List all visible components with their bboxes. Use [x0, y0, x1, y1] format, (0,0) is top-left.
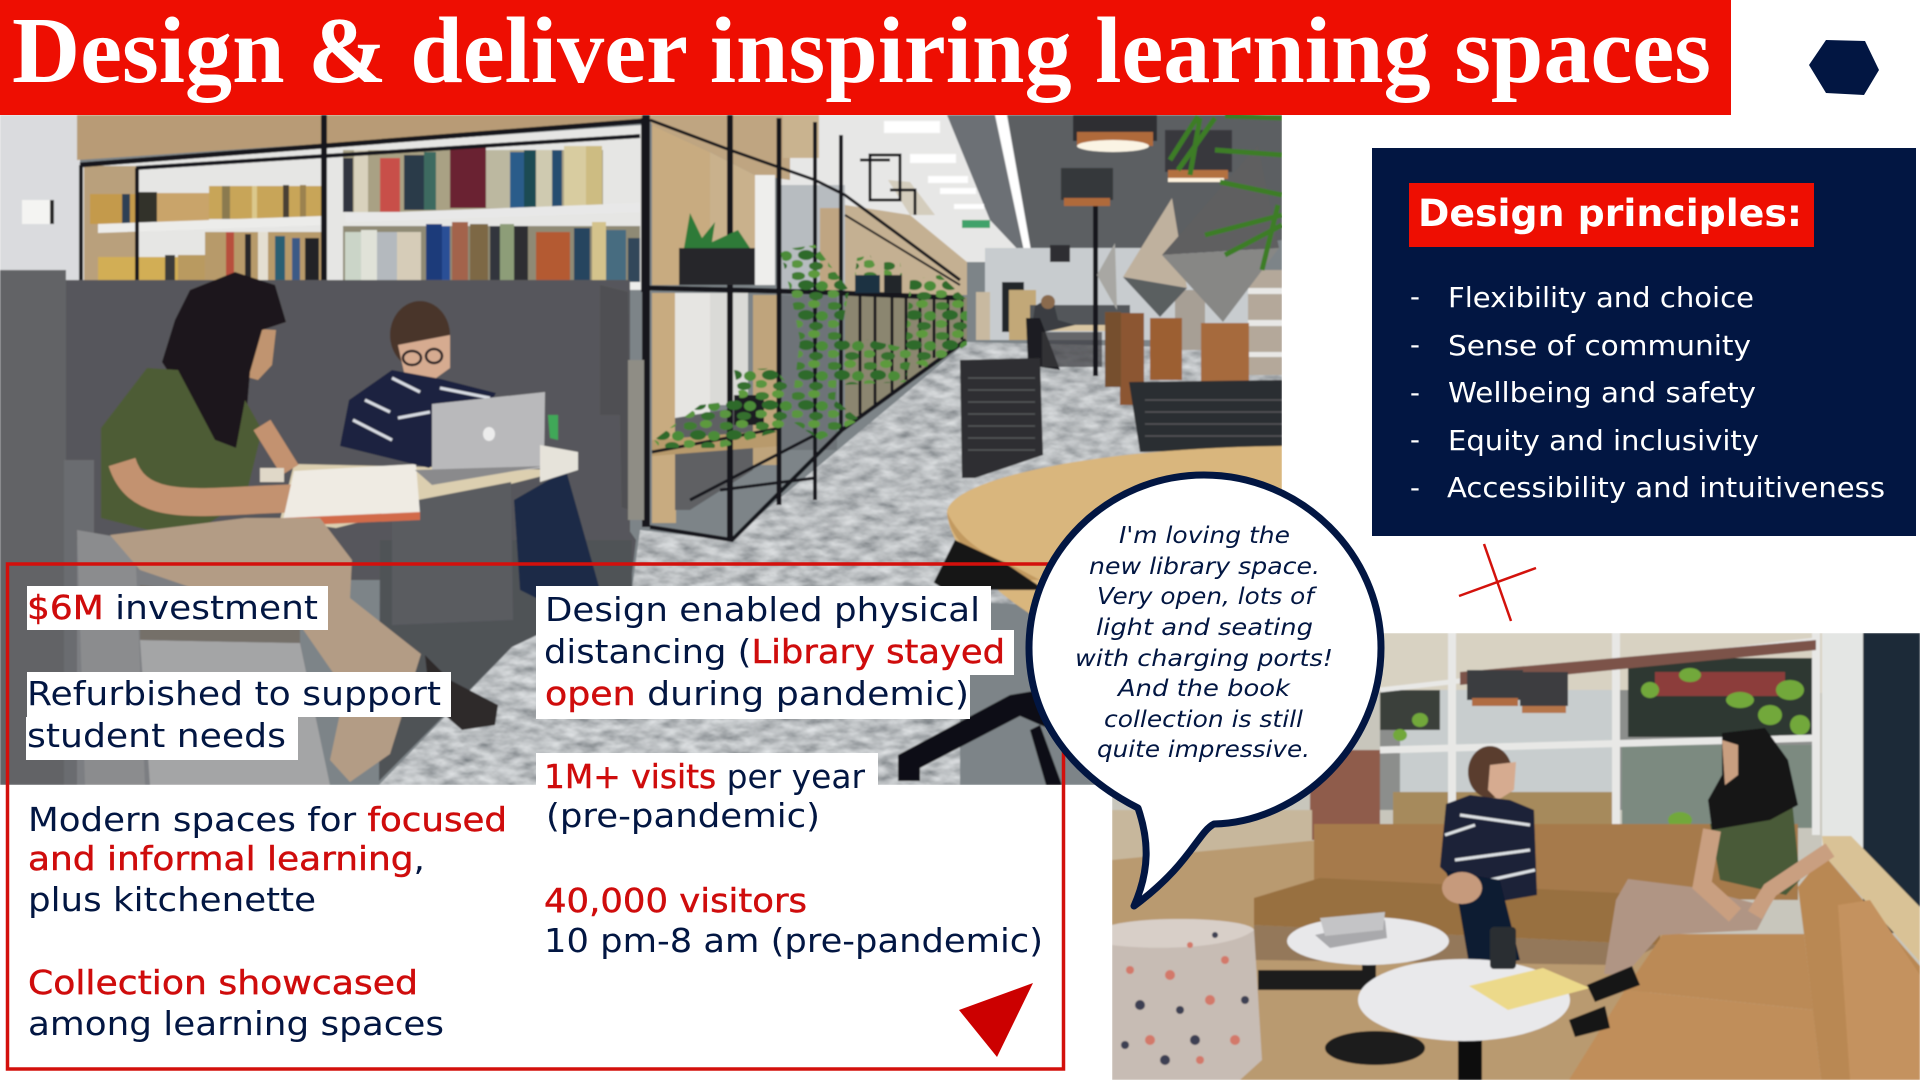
- panel: key facts frame: [8, 564, 1064, 1069]
- list of principles: -: [1410, 424, 1420, 456]
- text: modern spaces: and informal learning ,: [28, 839, 425, 878]
- text: modern spaces: [28, 800, 507, 919]
- table one: [1362, 960, 1376, 1010]
- back room: [1112, 633, 1822, 693]
- title: Design & deliver inspiring learning spaces: [12, 0, 1711, 103]
- window frame: [1380, 633, 1816, 835]
- text: visits: (pre-pandemic): [546, 796, 820, 835]
- list of principles: Wellbeing and safety: [1448, 377, 1756, 409]
- sofa arm right: [601, 416, 636, 571]
- list of principles: Accessibility and intuitiveness: [1447, 472, 1885, 504]
- pendant lamps: [1050, 115, 1232, 376]
- quote text: And the book: [1116, 674, 1292, 702]
- floor: [1112, 840, 1700, 1080]
- aisle ceiling: [1007, 115, 1282, 248]
- photo: lounge with two students: [1112, 633, 1920, 1080]
- quote text: with charging ports!: [1075, 644, 1333, 672]
- green top: [101, 368, 262, 539]
- shelf frames black: [646, 115, 966, 540]
- text: physical distancing: distancing ( Library stayed: [544, 632, 1005, 671]
- table: [280, 464, 566, 528]
- open book: [283, 464, 420, 520]
- book by laptop: [540, 445, 578, 482]
- desk and person: [1050, 324, 1106, 332]
- wall and dark panel: [1822, 633, 1866, 848]
- text: collection: [28, 963, 444, 1043]
- text: visits: 1M+ visits per year: [544, 757, 865, 796]
- shelf unit panels lower: [652, 293, 967, 523]
- text: physical distancing: [536, 586, 1014, 719]
- right sofa: [1625, 934, 1813, 1010]
- heading: design principles: [1409, 183, 1814, 247]
- books upper right: [343, 146, 640, 283]
- shelf unit panels upper: [652, 115, 967, 295]
- arms: [122, 462, 318, 502]
- quote text: [1075, 521, 1333, 763]
- quote text: quite impressive.: [1097, 735, 1310, 763]
- list of principles: -: [1410, 281, 1420, 313]
- upper wood cabinets: [77, 115, 650, 160]
- quote text: collection is still: [1104, 705, 1303, 733]
- round table: [947, 446, 1282, 620]
- text: physical distancing: open during pandemic): [545, 674, 969, 713]
- right woman legs: [514, 470, 600, 600]
- icon: navy hexagon: [1809, 40, 1879, 95]
- text: collection: Collection showcased: [28, 963, 418, 1002]
- text: visitors: 10 pm-8 am (pre-pandemic): [544, 921, 1043, 960]
- woman right: [390, 301, 450, 369]
- sofa back: [64, 280, 630, 580]
- back sofa: [1314, 824, 1798, 900]
- list of principles: [1410, 281, 1885, 504]
- text: physical distancing: Design enabled physical: [545, 590, 980, 629]
- icon: red triangle: [959, 983, 1033, 1057]
- heading: design principles: Design principles:: [1418, 192, 1802, 235]
- ledge: [1822, 836, 1920, 962]
- can: [1490, 927, 1516, 969]
- trousers: [110, 518, 421, 782]
- leaves: [1393, 668, 1810, 828]
- black frame: [80, 115, 643, 292]
- shelves: [402, 204, 604, 213]
- carpet foreground: [914, 574, 954, 755]
- books upper left: [90, 185, 325, 284]
- photo: library study space: [0, 115, 1282, 785]
- boot: [425, 655, 498, 730]
- chair base: [898, 688, 1062, 785]
- text: investment: $6M investment: [27, 588, 318, 627]
- list of principles: -: [1410, 472, 1420, 504]
- table two: [1458, 1030, 1482, 1080]
- quote text: I'm loving the: [1119, 521, 1290, 549]
- list of principles: Flexibility and choice: [1448, 282, 1754, 314]
- booklet: [1469, 968, 1590, 1010]
- text: refurbished: Refurbished to support: [27, 674, 441, 713]
- text: visitors: [544, 881, 1043, 960]
- left wall: [0, 115, 80, 280]
- text: visitors: 40,000 visitors: [544, 881, 807, 920]
- laptop: [432, 392, 545, 479]
- shelf background: [80, 125, 643, 290]
- title banner: [0, 0, 1731, 115]
- plants: [654, 213, 967, 448]
- back wall: [985, 248, 1255, 340]
- palm fronds: [1170, 116, 1282, 270]
- carpet: [632, 342, 1282, 620]
- shelf unit top: [648, 115, 790, 180]
- list of principles: Sense of community: [1448, 330, 1751, 362]
- quote text: Very open, lots of: [1097, 582, 1318, 610]
- text: refurbished: student needs: [27, 716, 286, 755]
- seat: [77, 560, 168, 785]
- list of principles: -: [1410, 377, 1420, 409]
- sculptures and wood posts: [1096, 198, 1282, 406]
- text: modern spaces: Modern spaces for focused: [28, 800, 507, 839]
- woman A: [1468, 746, 1512, 798]
- text: collection: among learning spaces: [28, 1004, 444, 1043]
- pouf: [1112, 919, 1262, 1080]
- quote text: light and seating: [1096, 613, 1313, 641]
- woman left hair and face: [248, 328, 277, 381]
- woman B: [1604, 879, 1769, 975]
- quote text: new library space.: [1089, 552, 1320, 580]
- pendant lamps: [1467, 670, 1523, 700]
- sofa base: [378, 574, 632, 780]
- callout: student quote speech bubble: [1029, 475, 1381, 906]
- list of principles: -: [1410, 329, 1420, 361]
- panel: design principles: [1372, 148, 1916, 536]
- list of principles: Equity and inclusivity: [1448, 425, 1759, 457]
- text: visits: [536, 753, 878, 835]
- icon: red cross: [1459, 544, 1536, 621]
- sofa wing: [0, 270, 66, 785]
- chairs: [960, 358, 1043, 478]
- text: modern spaces: plus kitchenette: [28, 880, 316, 919]
- ceiling end of aisle white: [780, 115, 1030, 262]
- text: refurbished: [26, 672, 451, 760]
